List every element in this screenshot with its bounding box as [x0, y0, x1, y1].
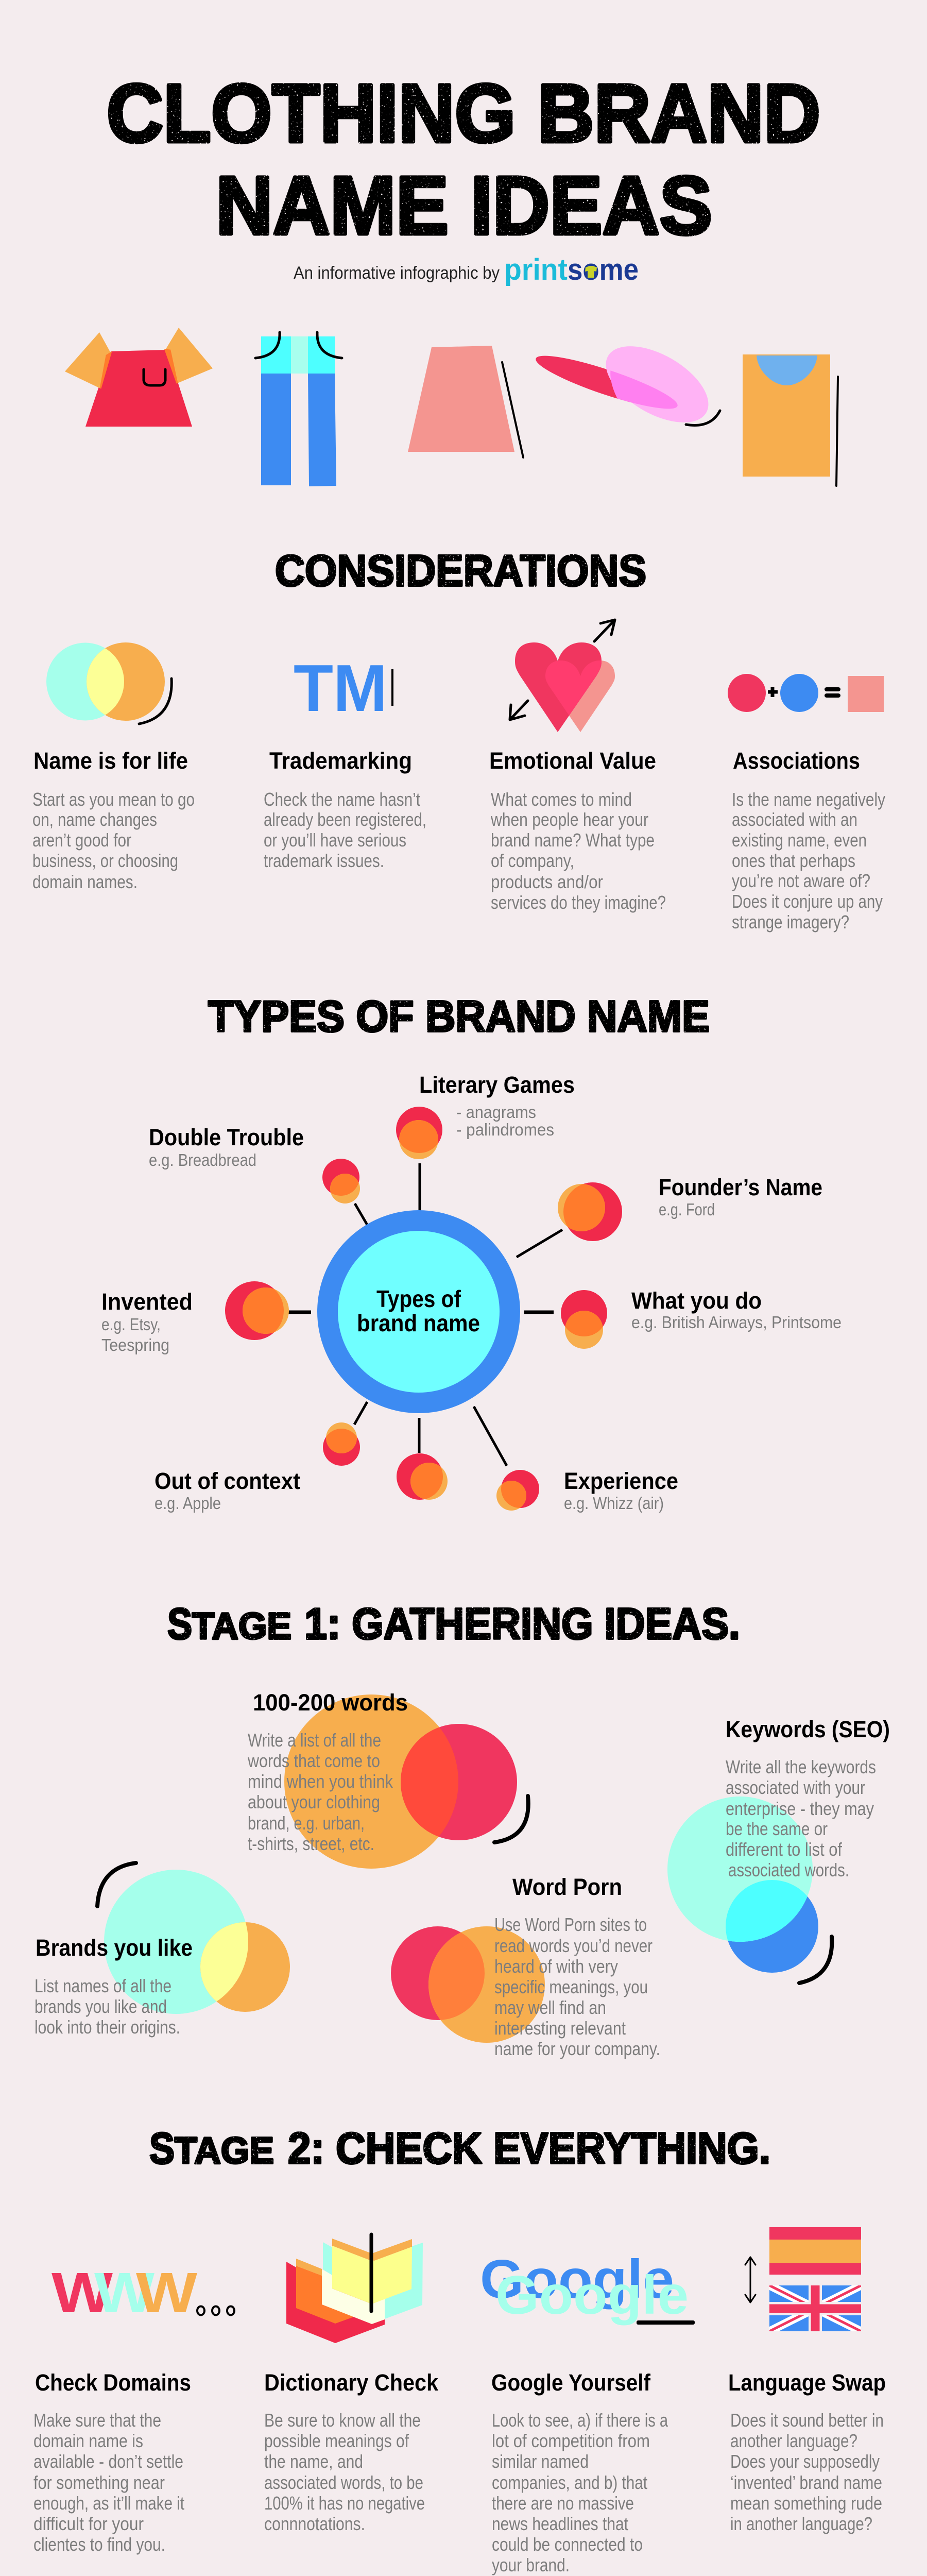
panel: language swap: ‘invented’ brand name: [730, 2472, 882, 2493]
label: invented: e.g. Etsy,: [101, 1315, 161, 1334]
panel: language swap: Language Swap: [728, 2369, 886, 2396]
panel: emotional value: brand name? What type: [491, 829, 655, 851]
panel: name is for life: Name is for life: [33, 748, 188, 774]
panel: trademarking: trademark issues.: [264, 850, 384, 871]
panel: name is for life: aren’t good for: [32, 829, 131, 851]
icon: www: W: [52, 2261, 113, 2325]
panel: associations: ones that perhaps: [732, 850, 855, 871]
text: brands you like: List names of all the: [35, 1975, 171, 1996]
panel: google yourself: there are no massive: [492, 2493, 634, 2514]
heading: stage 1: TAGE: [192, 1606, 291, 1647]
panel: dictionary check: Be sure to know all the: [264, 2410, 421, 2431]
panel: trademarking: already been registered,: [264, 809, 426, 830]
label: what you do: e.g. British Airways, Printsome: [631, 1313, 842, 1332]
venn: 100-200 words: [284, 1694, 528, 1869]
label: invented: [101, 1289, 193, 1354]
label: out of context: e.g. Apple: [154, 1494, 221, 1513]
label: experience: [564, 1468, 678, 1513]
panel: google yourself: lot of competition from: [492, 2430, 650, 2451]
panel: name is for life: domain names.: [32, 871, 138, 892]
panel: check domains: Check Domains: [35, 2369, 191, 2396]
text: 100-200 words: mind when you think: [248, 1771, 393, 1792]
arrow: down left: [510, 701, 528, 720]
text: 100-200 words: Write a list of all the: [248, 1730, 381, 1751]
venn: word porn: [391, 1926, 545, 2043]
text: word porn: heard of with very: [494, 1956, 618, 1977]
icon: www: [52, 2261, 234, 2325]
label: experience: e.g. Whizz (air): [564, 1494, 664, 1513]
text: 100-200 words: [247, 1689, 408, 1854]
title: [107, 67, 820, 251]
text: keywords: associated words.: [728, 1859, 849, 1880]
icon: cap: [536, 346, 721, 427]
label: founder's name: e.g. Ford: [659, 1200, 715, 1219]
label: literary games: - palindromes: [456, 1120, 554, 1139]
title: CLOTHING BRAND: [107, 67, 820, 159]
panel: check domains: available - don’t settle: [33, 2451, 183, 2472]
panel: check domains: for something near: [33, 2472, 165, 2493]
icon: associations equation: [728, 674, 884, 712]
spokes: [288, 1163, 562, 1466]
bubble: experience: [496, 1470, 539, 1511]
panel: google yourself: companies, and b) that: [492, 2472, 647, 2493]
heading: stage 1: 1: GATHERING IDEAS.: [304, 1600, 740, 1649]
panel: google yourself: [491, 2369, 668, 2575]
heading: stage 1: S: [167, 1600, 192, 1649]
panel: emotional value: services do they imagine?: [491, 892, 666, 913]
label: founder's name: [659, 1174, 822, 1219]
text: keywords: Write all the keywords: [726, 1756, 876, 1777]
panel: name is for life: [32, 748, 195, 892]
panel: trademarking: Check the name hasn’t: [264, 789, 420, 810]
panel: emotional value: of company,: [491, 850, 574, 871]
label: what you do: What you do: [631, 1287, 762, 1314]
subtitle with printsome logo: An informative infographic by: [294, 263, 500, 283]
label: literary games: - anagrams: [456, 1103, 536, 1122]
bubble: founder's name: [558, 1182, 622, 1241]
text: word porn: Use Word Porn sites to: [494, 1914, 647, 1935]
text: word porn: name for your company.: [494, 2038, 660, 2059]
panel: associations: existing name, even: [732, 829, 867, 851]
icon: flags: [745, 2227, 861, 2331]
panel: language swap: Does your supposedly: [730, 2451, 880, 2472]
panel: associations: you’re not aware of?: [732, 870, 870, 891]
panel: google yourself: your brand.: [492, 2554, 570, 2575]
panel: google yourself: Look to see, a) if there is a: [492, 2410, 668, 2431]
bubble: bottom: [397, 1453, 448, 1500]
icon: google: Google: [495, 2265, 689, 2326]
panel: trademarking: Trademarking: [269, 748, 412, 774]
label: what you do: [631, 1287, 842, 1332]
panel: check domains: [33, 2369, 191, 2555]
label: out of context: [154, 1468, 300, 1513]
panel: language swap: mean something rude: [730, 2493, 882, 2514]
label: literary games: Literary Games: [419, 1072, 575, 1098]
bubble: double trouble: [322, 1159, 360, 1204]
text: brands you like: look into their origins.: [35, 2016, 180, 2038]
panel: google yourself: news headlines that: [492, 2513, 628, 2534]
text: 100-200 words: brand, e.g. urban,: [248, 1812, 365, 1834]
text: keywords: Keywords (SEO): [726, 1716, 890, 1742]
panel: check domains: Make sure that the: [33, 2410, 161, 2431]
heading: considerations: CONSIDERATIONS: [275, 547, 646, 596]
text: keywords: different to list of: [726, 1839, 843, 1860]
label: out of context: Out of context: [154, 1468, 300, 1494]
panel: language swap: in another language?: [730, 2513, 872, 2534]
bubble: literary games: [396, 1107, 442, 1159]
panel: name is for life: business, or choosing: [32, 850, 178, 871]
bubble: out of context: [323, 1422, 360, 1466]
panel: google yourself: could be connected to: [492, 2534, 643, 2555]
text: keywords: associated with your: [726, 1777, 865, 1798]
panel: dictionary check: connnotations.: [264, 2513, 365, 2534]
panel: emotional value: What comes to mind: [491, 789, 632, 810]
label: double trouble: [149, 1124, 304, 1170]
heading: stage 2: 2: CHECK EVERYTHING.: [288, 2124, 770, 2173]
text: word porn: [494, 1874, 660, 2059]
panel: check domains: enough, as it’ll make it: [33, 2493, 184, 2514]
panel: emotional value: products and/or: [491, 871, 603, 892]
panel: check domains: difficult for your: [33, 2513, 144, 2534]
icon: tank top: [743, 354, 838, 486]
icon: google: Google: [480, 2249, 674, 2310]
panel: google yourself: Google Yourself: [491, 2369, 651, 2396]
hub: types of brand name: brand name: [357, 1310, 480, 1336]
panel: language swap: Does it sound better in: [730, 2410, 884, 2431]
text: 100-200 words: t-shirts, street, etc.: [248, 1833, 374, 1854]
subtitle with printsome logo: some: [568, 253, 639, 286]
panel: trademarking: [264, 748, 426, 871]
panel: dictionary check: the name, and: [264, 2451, 363, 2472]
venn: keywords: [667, 1797, 832, 1983]
panel: dictionary check: 100% it has no negative: [264, 2493, 425, 2514]
panel: name is for life: on, name changes: [32, 809, 157, 830]
text: brands you like: Brands you like: [36, 1935, 193, 1961]
heading: types of brand name: TYPES OF BRAND NAME: [208, 992, 710, 1041]
panel: associations: [732, 748, 885, 933]
label: invented: Invented: [101, 1289, 193, 1315]
hub: types of brand name: [317, 1210, 520, 1413]
subtitle with printsome logo: print: [504, 253, 568, 286]
subtitle with printsome logo: [294, 253, 639, 286]
icon: trousers: [255, 332, 342, 486]
panel: language swap: another language?: [730, 2430, 857, 2451]
text: brands you like: [35, 1935, 193, 2038]
panel: emotional value: Emotional Value: [489, 748, 656, 774]
text: 100-200 words: words that come to: [247, 1750, 380, 1771]
icon: trademark: TM: [294, 651, 387, 725]
label: experience: Experience: [564, 1468, 678, 1494]
panel: trademarking: or you’ll have serious: [264, 829, 406, 851]
text: word porn: may well find an: [494, 1997, 606, 2018]
title: NAME IDEAS: [216, 159, 712, 251]
label: invented: Teespring: [101, 1335, 169, 1354]
label: double trouble: Double Trouble: [149, 1124, 304, 1150]
text: keywords: [726, 1716, 890, 1880]
panel: dictionary check: Dictionary Check: [264, 2369, 439, 2396]
panel: dictionary check: possible meanings of: [264, 2430, 409, 2451]
icon: www: W: [94, 2261, 154, 2325]
panel: check domains: clientes to find you.: [33, 2534, 165, 2555]
icon: t-shirt: [65, 328, 213, 427]
panel: associations: associated with an: [732, 809, 857, 830]
bubble: what you do: [561, 1290, 607, 1349]
label: founder's name: Founder’s Name: [659, 1174, 822, 1200]
panel: google yourself: similar named: [492, 2451, 589, 2472]
panel: dictionary check: [264, 2369, 439, 2534]
icon: hearts: [515, 642, 615, 732]
icon: dictionary: [286, 2234, 423, 2343]
text: word porn: read words you’d never: [494, 1935, 653, 1956]
label: literary games: [419, 1072, 575, 1139]
panel: associations: strange imagery?: [732, 911, 849, 933]
label: double trouble: e.g. Breadbread: [149, 1150, 256, 1170]
icon: skirt: [408, 346, 523, 457]
hub: types of brand name: Types of: [376, 1285, 461, 1312]
panel: associations: Is the name negatively: [732, 789, 885, 810]
text: word porn: interesting relevant: [494, 2018, 626, 2039]
text: 100-200 words: about your clothing: [248, 1791, 380, 1812]
panel: associations: Associations: [733, 748, 860, 774]
panel: dictionary check: associated words, to be: [264, 2472, 423, 2493]
text: keywords: enterprise - they may: [726, 1798, 874, 1819]
panel: emotional value: [489, 748, 666, 913]
bubble: invented: [225, 1281, 289, 1340]
icon: google: [480, 2249, 695, 2326]
text: word porn: specific meanings, you: [494, 1976, 648, 1997]
heading: stage 2: TAGE: [175, 2130, 274, 2172]
heading: stage 2: S: [149, 2124, 175, 2173]
panel: emotional value: when people hear your: [490, 809, 648, 830]
text: brands you like: brands you like and: [35, 1996, 167, 2017]
panel: associations: Does it conjure up any: [732, 891, 883, 912]
arrow: up right: [594, 620, 615, 641]
text: word porn: Word Porn: [512, 1874, 622, 1900]
panel: check domains: domain name is: [33, 2430, 143, 2451]
icon: venn circles: [46, 642, 171, 724]
icon: www: W: [136, 2261, 197, 2325]
panel: name is for life: Start as you mean to go: [32, 789, 195, 810]
text: 100-200 words: 100-200 words: [253, 1689, 408, 1716]
venn: brands you like: [97, 1863, 290, 2014]
text: keywords: be the same or: [726, 1818, 828, 1839]
panel: language swap: [728, 2369, 886, 2534]
